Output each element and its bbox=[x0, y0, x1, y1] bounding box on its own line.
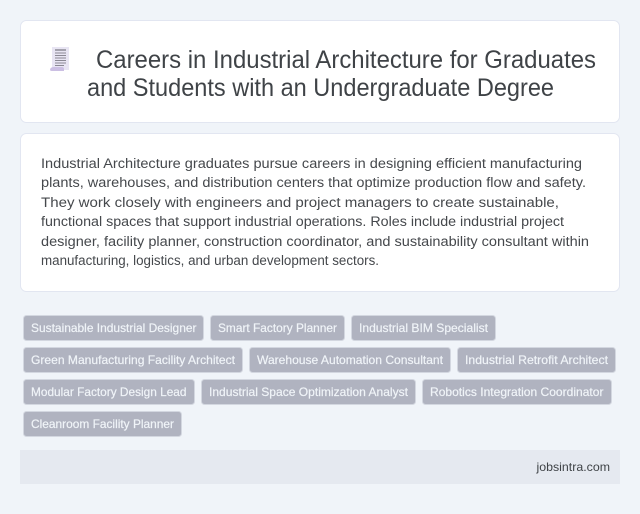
tag: Green Manufacturing Facility Architect bbox=[24, 348, 242, 372]
panel: description: manufacturing, logistics, and urban development sectors. bbox=[41, 253, 379, 269]
tag: Industrial Retrofit Architect: Industrial Retrofit Architect bbox=[465, 353, 609, 367]
tag: Sustainable Industrial Designer bbox=[24, 316, 204, 340]
panel: description bbox=[20, 134, 620, 292]
tag: Warehouse Automation Consultant bbox=[250, 348, 450, 372]
tag: Modular Factory Design Lead: Modular Factory Design Lead bbox=[31, 385, 186, 399]
tag: Industrial Space Optimization Analyst: Industrial Space Optimization Analyst bbox=[209, 385, 409, 399]
tag: Sustainable Industrial Designer: Sustainable Industrial Designer bbox=[31, 321, 196, 335]
tag: Cleanroom Facility Planner: Cleanroom Facility Planner bbox=[31, 417, 174, 431]
panel: description: functional spaces that support industrial operations. Roles include industrial project bbox=[41, 214, 564, 230]
panel: description: plants, warehouses, and distribution centers that optimize production flow and safety. bbox=[41, 175, 586, 191]
panel: title card bbox=[20, 20, 620, 122]
panel: description: designer, facility planner, construction coordinator, and sustainability consultant within bbox=[41, 234, 589, 250]
title: and Students with an Undergraduate Degree bbox=[87, 74, 554, 102]
tag: Industrial Space Optimization Analyst bbox=[202, 380, 416, 404]
tag: Robotics Integration Coordinator: Robotics Integration Coordinator bbox=[430, 385, 604, 399]
tag: Robotics Integration Coordinator bbox=[422, 380, 612, 404]
tag: Industrial BIM Specialist bbox=[352, 316, 496, 340]
tag: Smart Factory Planner: Smart Factory Planner bbox=[218, 321, 337, 335]
panel: description: Industrial Architecture graduates pursue careers in designing efficient manufacturing bbox=[41, 156, 582, 172]
tag: Modular Factory Design Lead bbox=[24, 380, 194, 404]
tag: Warehouse Automation Consultant: Warehouse Automation Consultant bbox=[257, 353, 444, 367]
footer bbox=[20, 450, 620, 484]
icon: document bbox=[50, 47, 69, 71]
footer: jobsintra.com bbox=[535, 460, 610, 474]
tag: Industrial Retrofit Architect bbox=[458, 348, 616, 372]
panel: description: They work closely with engineers and project managers to create sustainable, bbox=[41, 195, 559, 211]
tag: Industrial BIM Specialist: Industrial BIM Specialist bbox=[359, 321, 489, 335]
tag: Green Manufacturing Facility Architect: Green Manufacturing Facility Architect bbox=[31, 353, 236, 367]
tag: Cleanroom Facility Planner bbox=[24, 412, 182, 436]
title bbox=[87, 46, 596, 102]
tag: Smart Factory Planner bbox=[210, 316, 344, 340]
title: Careers in Industrial Architecture for Graduates bbox=[96, 46, 596, 74]
